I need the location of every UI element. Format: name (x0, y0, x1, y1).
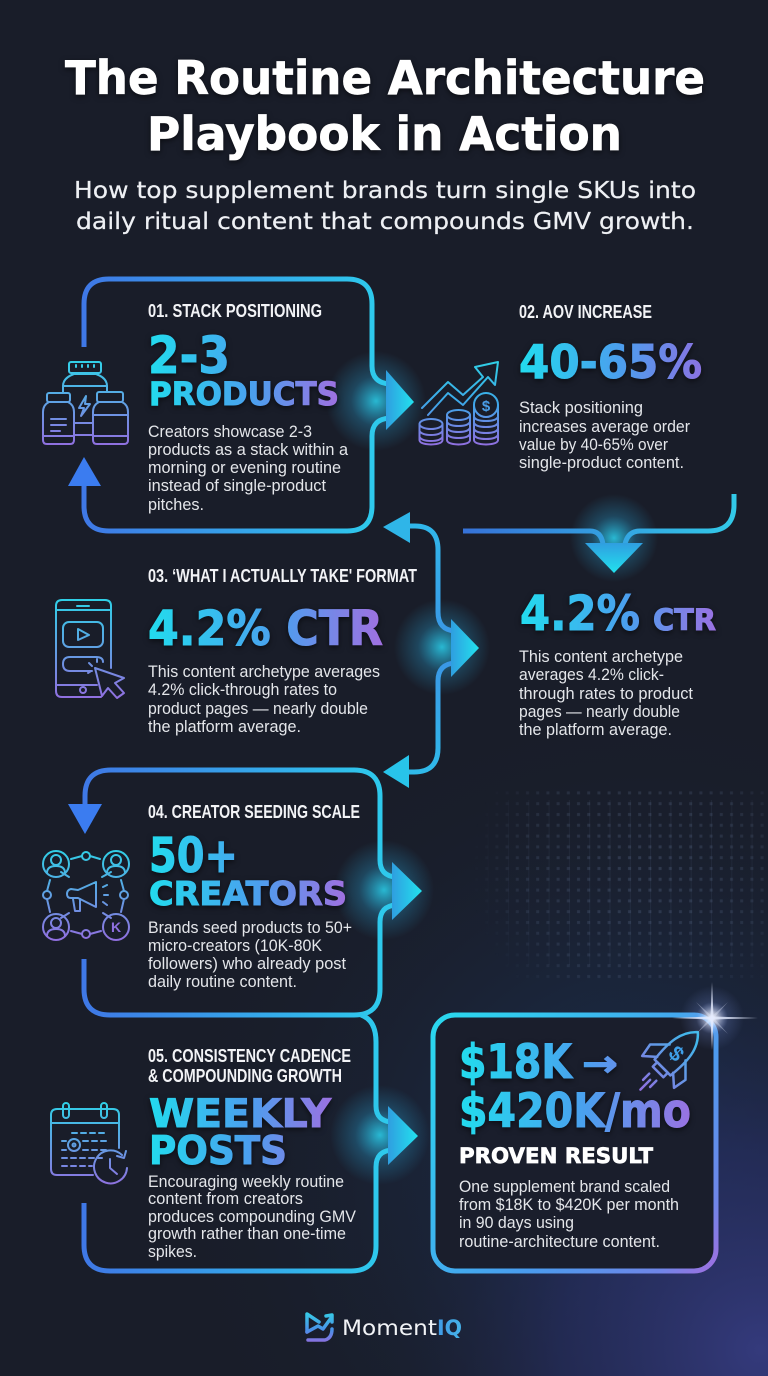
panel frame 04 (84, 770, 396, 1015)
arrow: left to panel 04 (383, 755, 409, 788)
stat: 40-65%: 40-65% (519, 335, 702, 389)
glow behind arrow 04 (334, 840, 434, 940)
subtitle (74, 178, 696, 235)
stat: 2-3 products: 2-3 (148, 327, 230, 386)
body text 04: micro-creators (10K-80K (148, 937, 322, 955)
glow behind arrow 01 (326, 351, 426, 451)
body text 02: single-product content. (519, 454, 684, 472)
icon: logo mark (307, 1314, 332, 1340)
heading 04: 04. CREATOR SEEDING SCALE (148, 802, 360, 822)
body text right CTR: pages — nearly double (519, 703, 680, 721)
icon: supplement bottles (43, 362, 128, 444)
glow behind arrow 03 (394, 599, 490, 695)
result frame (433, 1015, 716, 1271)
panel: 05 consistency cadence (51, 1015, 430, 1271)
result body text: routine-architecture content. (459, 1233, 660, 1251)
body text right CTR: the platform average. (519, 721, 672, 739)
star flare (672, 982, 758, 1050)
panel: 04 creator seeding (43, 770, 434, 1015)
subtitle: How top supplement brands turn single SKUs into (74, 178, 696, 204)
arrow: up into icon (68, 457, 101, 486)
body text 05: growth rather than one-time (148, 1225, 346, 1243)
body text 03: 4.2% click-through rates to (148, 681, 337, 699)
subtitle: daily ritual content that compounds GMV growth. (76, 209, 694, 235)
result body text: from $18K to $420K per month (459, 1196, 679, 1214)
heading 05 (148, 1046, 351, 1086)
body text right CTR: This content archetype (519, 648, 683, 666)
body text 05: spikes. (148, 1243, 197, 1261)
stat: weekly posts (149, 1092, 332, 1174)
stat: 4.2% CTR right: 4.2% (520, 586, 640, 642)
arrow: right (392, 862, 422, 920)
body text 05: content from creators (148, 1190, 303, 1208)
stat: 2-3 products: PRODUCTS (149, 375, 339, 413)
arrow: left to panel 01 (383, 512, 410, 543)
panel: 02 AOV increase (420, 302, 734, 582)
stat: $18K to $420K per month: $18K (459, 1035, 573, 1090)
body text 04: followers) who already post (148, 955, 346, 973)
body text 01: Creators showcase 2-3 (148, 423, 312, 441)
dollar mark on coin: $ (482, 398, 491, 415)
body text 03 (148, 663, 380, 736)
stat: $18K to $420K per month: $420K/mo (459, 1084, 691, 1139)
panel: 01 stack positioning (43, 279, 426, 531)
stat: 4.2% CTR right: CTR (653, 603, 716, 637)
arrow: right to result (388, 1106, 418, 1165)
wordmark: Moment (342, 1316, 437, 1340)
title (65, 51, 705, 161)
body text 01 (148, 423, 349, 514)
body text 05: produces compounding GMV (148, 1208, 356, 1226)
body text 02: value by 40-65% over (519, 436, 668, 454)
panel frame 05 (84, 1015, 392, 1271)
stat: weekly posts: POSTS (149, 1129, 287, 1174)
icon: phone and cursor (56, 600, 124, 698)
k mark on creator circle: K (111, 919, 121, 935)
body text 04: daily routine content. (148, 973, 297, 991)
panel: 03 what I actually take (56, 566, 417, 736)
heading 05: 05. CONSISTENCY CADENCE (148, 1046, 351, 1066)
stat: 50+ creators: CREATORS (149, 874, 347, 913)
icon: growth arrow and coins (420, 362, 498, 444)
result body text (459, 1178, 679, 1251)
logo: MomentIQ (307, 1314, 462, 1340)
body text 01: products as a stack within a (148, 441, 349, 459)
heading 02: 02. AOV INCREASE (519, 302, 652, 322)
icon: rocket (623, 1014, 716, 1107)
glow behind downward arrow (570, 494, 658, 582)
body text 02: increases average order (519, 418, 690, 436)
body text right CTR: averages 4.2% click- (519, 666, 664, 684)
body text right CTR (519, 648, 693, 739)
stat: 2-3 products (148, 327, 339, 413)
body text 03: This content archetype averages (148, 663, 380, 681)
stat: $18K to $420K per month (459, 1035, 691, 1139)
result body text: One supplement brand scaled (459, 1178, 670, 1196)
title: Playbook in Action (147, 107, 622, 161)
heading 03: 03. ‘WHAT I ACTUALLY TAKE' FORMAT (148, 566, 417, 586)
stat: 4.2% CTR right (520, 586, 716, 642)
icon: creator network with megaphone (43, 851, 129, 940)
body text 03: the platform average. (148, 718, 301, 736)
arrow: down into icon (68, 804, 102, 834)
stat: 50+ creators (149, 828, 347, 913)
arrow: down (585, 543, 643, 573)
wordmark accent: IQ (437, 1316, 462, 1340)
arrow: right to CTR (451, 619, 479, 677)
title: The Routine Architecture (65, 51, 705, 105)
stat: 50+ creators: 50+ (149, 828, 238, 884)
body text 04: Brands seed products to 50+ (148, 919, 352, 937)
result body text: in 90 days using (459, 1214, 574, 1232)
panel frame 01 (84, 279, 390, 531)
connector lines (407, 526, 455, 772)
connector to CTR (463, 494, 734, 544)
page background (360, 791, 768, 1376)
body text 05: Encouraging weekly routine (148, 1173, 344, 1191)
body text 02 (519, 399, 690, 472)
body text 05 (148, 1173, 356, 1261)
body text 01: pitches. (148, 496, 204, 514)
arrow: right to AOV (386, 370, 414, 430)
result heading: PROVEN RESULT (459, 1144, 654, 1168)
stat: weekly posts: WEEKLY (149, 1092, 332, 1137)
heading 05: & COMPOUNDING GROWTH (148, 1066, 342, 1086)
stat: 4.2% CTR: 4.2% CTR (148, 601, 383, 657)
connector: double-headed flow between panels (383, 512, 490, 788)
stat: $18K to $420K per month: → (582, 1044, 618, 1085)
body text 03: product pages — nearly double (148, 700, 368, 718)
glow behind arrow 05 (330, 1085, 430, 1185)
heading 01: 01. STACK POSITIONING (148, 301, 322, 321)
body text 04 (148, 919, 352, 991)
body text 01: instead of single-product (148, 477, 326, 495)
body text 01: morning or evening routine (148, 459, 341, 477)
body text right CTR: through rates to product (519, 685, 693, 703)
panel: proven result (433, 982, 758, 1271)
icon: rocket: $ (664, 1041, 689, 1066)
body text 02: Stack positioning (519, 399, 643, 417)
icon: calendar and clock (51, 1103, 127, 1183)
panel: right CTR stat (519, 586, 716, 739)
